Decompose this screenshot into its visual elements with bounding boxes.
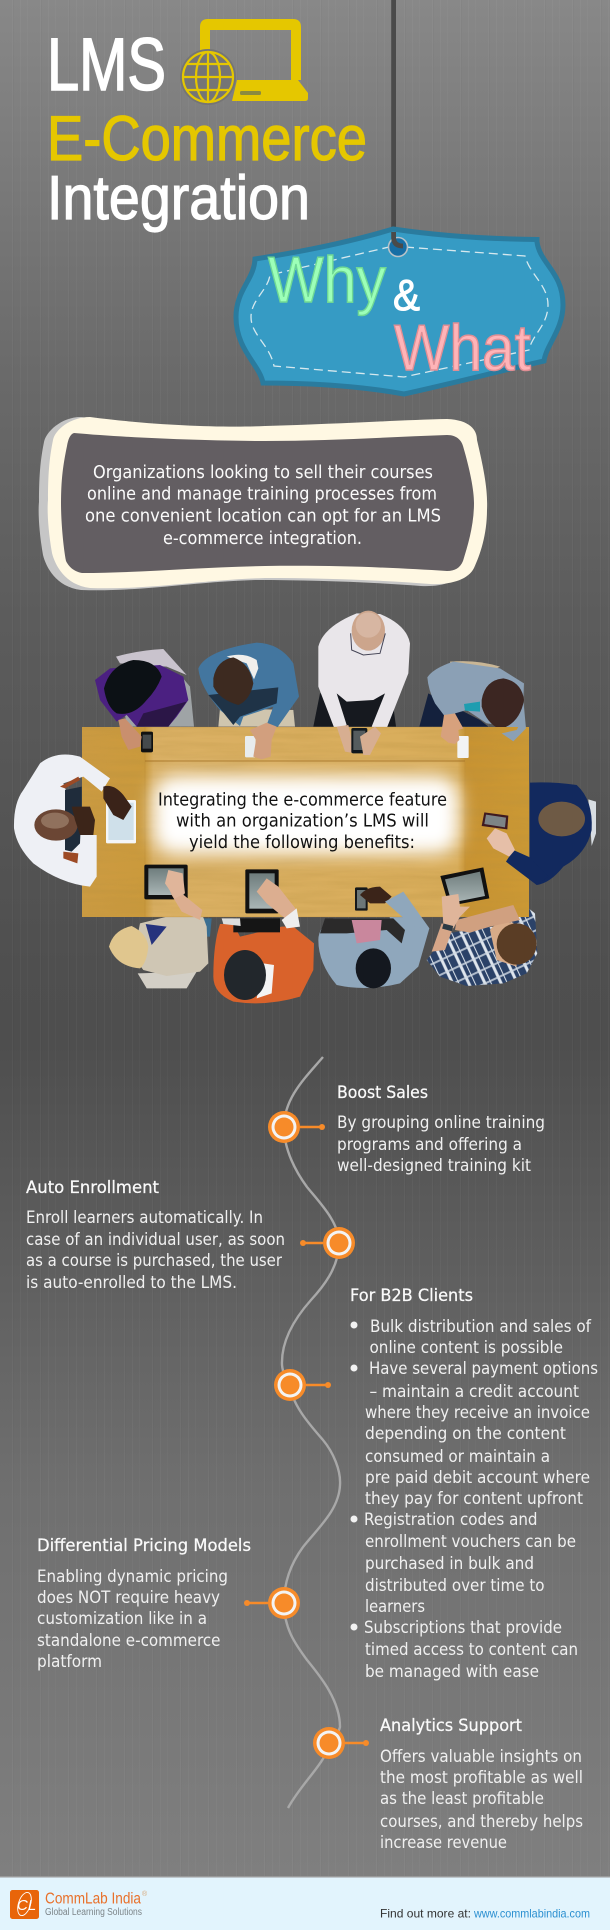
text block: differential pricing models: platform [37,1652,102,1671]
panel: introduction [39,417,487,590]
text block: differential pricing models: Enabling dynamic pricing [37,1567,228,1586]
table text: yield the following benefits: [189,832,415,853]
text block: b2b clients: Bulk distribution and sales of [370,1317,592,1336]
text block: analytics support: the most profitable as well [380,1768,583,1787]
panel interior [61,433,474,573]
panel shadow [39,417,478,590]
text block: differential pricing models [37,1536,251,1671]
text block: b2b clients: learners [365,1597,425,1616]
intro text: online and manage training processes from [87,484,437,504]
person: blue sweater [198,643,299,728]
timeline node: analytics support [313,1727,369,1759]
text block: boost sales [337,1083,545,1175]
tag shape [236,229,563,394]
text block: auto enrollment: is auto-enrolled to the LMS. [26,1273,237,1292]
icon: commlab logo [10,1890,39,1919]
person: purple top [95,649,194,727]
person: blonde woman [109,908,212,988]
footer [0,1876,610,1930]
timeline node: boost sales [268,1111,325,1143]
intro text [85,462,441,549]
table glow [153,776,459,854]
text block: auto enrollment [26,1178,285,1292]
title: LMS [47,23,166,106]
timeline node: auto enrollment [300,1227,355,1259]
text block: differential pricing models: customization like in a [37,1609,207,1628]
text block: b2b clients: pre paid debit account where [365,1468,590,1487]
find out more link: www.commlabindia.com [473,1906,590,1920]
table devices and hands: top right [337,713,526,758]
logo wordmark: CommLab India [45,1890,141,1908]
text block: b2b clients: distributed over time to [365,1576,544,1595]
tag words: & [393,271,420,320]
intro text: Organizations looking to sell their courses [93,462,433,483]
hanging tag: why and what [236,0,563,394]
person: plaid shirt [427,902,537,986]
icon: commlab logo: CL [17,1897,36,1914]
logo wordmark: ® [142,1890,148,1898]
text block: b2b clients: purchased in bulk and [365,1554,534,1573]
text block: b2b clients: – maintain a credit account [370,1382,579,1401]
find out more link [380,1906,590,1920]
text block: b2b clients: depending on the content [365,1424,566,1443]
timeline curve [282,1057,340,1808]
tag words [268,243,531,384]
text block: analytics support: Offers valuable insights on [380,1747,582,1766]
text block: b2b clients: enrollment vouchers can be [365,1532,576,1551]
text block: boost sales: programs and offering a [337,1135,522,1154]
text block: auto enrollment: Enroll learners automatically. In [26,1208,263,1227]
text block: differential pricing models: standalone e-commerce [37,1631,220,1650]
text block: analytics support [380,1716,583,1852]
string [394,0,403,246]
stitching [251,247,548,377]
text block: auto enrollment: case of an individual user, as soon [26,1230,285,1249]
text block: differential pricing models: Differential Pricing Models [37,1536,251,1555]
text block: differential pricing models: does NOT require heavy [37,1588,220,1607]
text block: b2b clients: they pay for content upfront [365,1489,583,1508]
hole [388,238,408,256]
person: white shirt standing [313,611,410,733]
table text [158,790,447,853]
text block: boost sales: well-designed training kit [337,1156,531,1175]
icon: laptop with globe [180,19,308,105]
person: white shirt left with tablet [14,754,136,887]
text block: b2b clients: Subscriptions that provide [364,1618,562,1637]
table devices and hands: bottom right [355,812,548,933]
text block: b2b clients: Registration codes and [364,1510,538,1529]
text block: auto enrollment: Auto Enrollment [26,1178,160,1197]
text block: b2b clients: be managed with ease [365,1662,539,1681]
person: denim shirt [318,892,429,988]
text block: b2b clients: timed access to content can [365,1640,578,1659]
text block: analytics support: as the least profitable [380,1789,544,1808]
intro text: one convenient location can opt for an LMS [85,506,441,526]
text block: boost sales: Boost Sales [337,1083,428,1102]
text block: b2b clients [350,1286,598,1681]
tag words: Why [268,243,386,316]
table text: with an organization’s LMS will [176,810,429,832]
table [82,727,529,917]
title: Integration [47,164,310,233]
text block: b2b clients: online content is possible [370,1338,563,1357]
text block: analytics support: Analytics Support [380,1716,523,1735]
text block: b2b clients: consumed or maintain a [365,1447,550,1466]
title [47,23,367,233]
person: grey jacket [419,661,526,741]
intro text: e-commerce integration. [163,528,362,549]
text block: analytics support: courses, and thereby helps [380,1812,583,1831]
timeline node: differential pricing [244,1587,300,1619]
find out more link: Find out more at: [380,1906,471,1920]
person: navy jacket right [527,782,596,885]
table text: Integrating the e-commerce feature [158,790,447,810]
text block: auto enrollment: as a course is purchased, the user [26,1251,282,1270]
table devices and hands: top [118,718,277,759]
illustration: people around a table [14,611,596,1003]
logo wordmark [45,1890,148,1918]
text block: boost sales: By grouping online training [337,1113,545,1132]
text block: b2b clients: For B2B Clients [350,1286,473,1305]
table devices and hands: bottom left [144,865,300,928]
logo wordmark: Global Learning Solutions [45,1907,142,1918]
text block: analytics support: increase revenue [380,1833,507,1852]
title: E-Commerce [47,104,367,174]
timeline node: b2b clients [274,1369,331,1401]
tag words: What [394,311,531,384]
text block: b2b clients: where they receive an invoice [365,1403,590,1422]
person: orange sweater [213,918,314,1003]
panel border [48,417,487,588]
